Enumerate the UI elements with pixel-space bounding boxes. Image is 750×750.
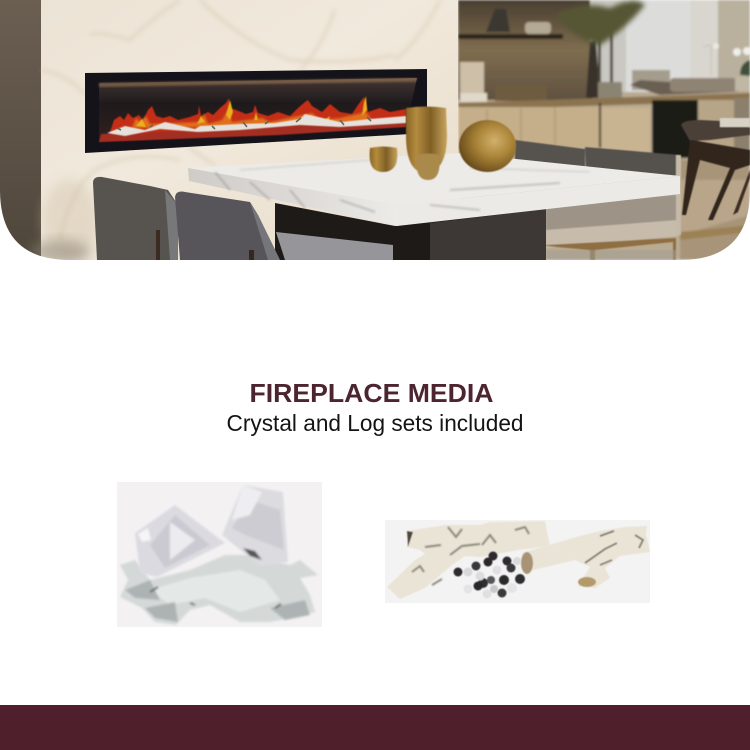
- fireplace glass glow: [99, 78, 417, 87]
- subheading: Crystal and Log sets included: [226, 410, 524, 436]
- flames: [110, 97, 406, 138]
- marble wall: [30, 0, 458, 264]
- fireplace: [85, 69, 427, 153]
- table base: [275, 203, 546, 260]
- fireplace frame: [85, 69, 427, 153]
- marble table top: [188, 153, 680, 226]
- gold cup: [370, 146, 397, 172]
- heading: fireplace media: FIREPLACE MEDIA: [250, 380, 494, 408]
- small gold cup: [416, 154, 440, 180]
- room background: [458, 0, 750, 260]
- black and clear crystals: [454, 552, 525, 598]
- birch log: [107, 114, 406, 136]
- gold vases: [370, 106, 516, 180]
- background wooden chair: [681, 118, 750, 220]
- image: birch logs and crystals: [385, 520, 650, 603]
- ember bed: [99, 120, 406, 142]
- right chairs: [515, 140, 681, 260]
- gold sphere: [459, 120, 516, 172]
- image: crystal media: [117, 482, 322, 627]
- crystal splash base: [120, 555, 318, 625]
- birch log left: [387, 521, 550, 599]
- crystal chunk right: [222, 485, 288, 566]
- crystal chunk left: [135, 505, 225, 577]
- tall gold vase: [406, 106, 447, 173]
- hero photo: fireplace dining room: [0, 0, 750, 264]
- front grey chairs: [93, 177, 393, 260]
- footer band: [0, 705, 750, 750]
- birch log right: [521, 526, 650, 588]
- dark side column: [0, 0, 41, 260]
- firebox interior: [99, 78, 417, 142]
